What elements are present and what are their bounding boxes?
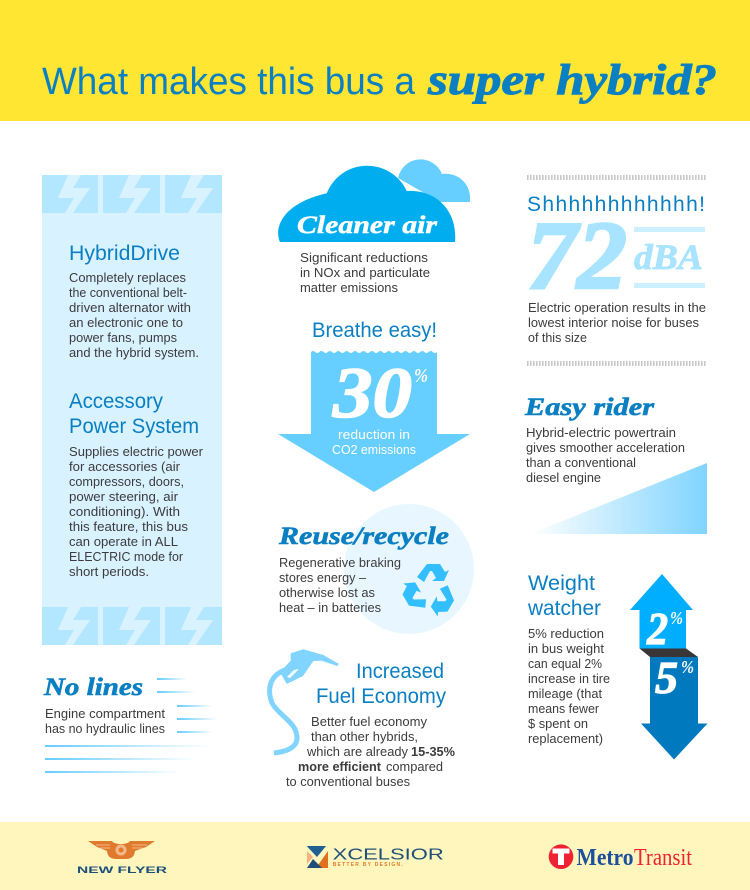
- arrow: down 5 percent: 5: [655, 652, 678, 703]
- title banner: [0, 0, 750, 121]
- heading: Increased Fuel Economy: Fuel Economy: [316, 685, 446, 708]
- heading: Increased Fuel Economy: [316, 660, 446, 708]
- arrow: up 2 percent: %: [670, 608, 683, 628]
- heading: Increased Fuel Economy: Increased: [356, 660, 444, 683]
- text: accessory power description: this feature, this bus: [69, 519, 189, 534]
- text: accessory power description: can operate in ALL: [69, 534, 178, 549]
- text: hybrid drive description: Completely replaces: [69, 270, 186, 285]
- text: weight description: increase in tire: [528, 671, 610, 686]
- text: fuel economy description: Better fuel economy: [311, 714, 427, 729]
- panel: reuse recycle: [278, 504, 474, 634]
- heading: HybridDrive: HybridDrive: [69, 242, 180, 265]
- text: hybrid drive description: and the hybrid system.: [69, 345, 199, 360]
- text: accessory power description: [69, 444, 204, 579]
- text: accessory power description: for accessories (air: [69, 459, 181, 474]
- text: weight description: 5% reduction: [528, 626, 604, 641]
- text: quiet description: of this size: [528, 330, 587, 345]
- panel: cleaner air: [278, 159, 470, 295]
- text: quiet description: lowest interior noise for buses: [528, 315, 699, 330]
- text: weight description: in bus weight: [528, 641, 604, 656]
- text: accessory power description: power steering, air: [69, 489, 179, 504]
- text: no lines description: has no hydraulic lines: [45, 721, 165, 736]
- stat: 72 dBA: dBA: [634, 237, 703, 277]
- text: fuel economy description: 15-35%: [411, 744, 455, 759]
- text: accessory power description: short periods.: [69, 564, 149, 579]
- text: cleaner air description: Significant reductions: [300, 250, 429, 265]
- text: fuel economy description: which are already: [306, 744, 408, 759]
- heading: Accessory Power System: [69, 390, 199, 438]
- icon: clouds: [278, 159, 470, 242]
- arrow: down: [278, 351, 470, 492]
- arrow: up 2 percent: 2: [646, 603, 668, 654]
- logo: Metro Transit: [549, 844, 692, 871]
- heading: Weight watcher: watcher: [527, 597, 601, 620]
- text: weight description: mileage (that: [528, 686, 602, 701]
- top lightning strip: [42, 175, 222, 213]
- text: weight description: means fewer: [528, 701, 600, 716]
- text: hybrid drive description: driven alternator with: [69, 300, 191, 315]
- stat: 30 percent: %: [414, 365, 428, 387]
- text: hybrid drive description: an electronic one to: [69, 315, 183, 330]
- text: accessory power description: conditioning). With: [69, 504, 180, 519]
- chart: acceleration ramp: [530, 463, 707, 534]
- text: reduction in CO2: CO2 emissions: [332, 442, 416, 457]
- text: reduction in CO2: [332, 427, 416, 457]
- text: reduction in CO2: reduction in: [338, 427, 410, 442]
- panel: hybrid drive and accessory power: [42, 175, 222, 645]
- text: easy rider description: [526, 425, 685, 485]
- panel: quiet operation: [527, 178, 706, 364]
- text: reuse description: stores energy –: [279, 570, 367, 585]
- panel: increased fuel economy: [270, 649, 455, 789]
- text: hybrid drive description: power fans, pumps: [69, 330, 177, 345]
- footer band: [0, 822, 750, 890]
- heading: Accessory Power System: Accessory: [69, 390, 163, 413]
- text: hybrid drive description: [69, 270, 199, 360]
- heading: No lines: No lines: [43, 674, 143, 701]
- text: weight description: can equal 2%: [528, 656, 602, 671]
- logo: Xcelsior: BETTER BY DESIGN.: [333, 862, 403, 868]
- text: easy rider description: gives smoother acceleration: [526, 440, 685, 455]
- arrow: down 5 percent: [641, 652, 708, 760]
- text: no lines description: Engine compartment: [45, 706, 165, 721]
- text: fuel economy description: to conventional buses: [286, 774, 410, 789]
- logo: Xcelsior: XCELSIOR: [333, 846, 444, 864]
- text: reuse description: heat – in batteries: [279, 600, 381, 615]
- text: fuel economy description: than other hybrids,: [311, 729, 418, 744]
- text: quiet description: Electric operation results in the: [528, 300, 706, 315]
- heading: Breathe easy: Breathe easy!: [312, 319, 437, 342]
- text: reuse description: Regenerative braking: [279, 555, 401, 570]
- text: easy rider description: diesel engine: [526, 470, 601, 485]
- text: accessory power description: ELECTRIC mode for: [69, 549, 184, 564]
- logo: New Flyer: NEW FLYER: [77, 865, 167, 876]
- text: easy rider description: Hybrid-electric powertrain: [526, 425, 676, 440]
- heading: Reuse/recycle: Reuse/recycle: [278, 523, 449, 550]
- text: no lines description: [45, 706, 165, 736]
- panel: breathe easy: [278, 319, 470, 492]
- text: cleaner air description: in NOx and particulate: [300, 265, 430, 280]
- heading: Weight watcher: [527, 572, 601, 620]
- text: quiet description: [528, 300, 706, 345]
- text: cleaner air description: [300, 250, 430, 295]
- heading: Weight watcher: Weight: [528, 572, 595, 595]
- text: hybrid drive description: the conventional belt-: [69, 285, 187, 300]
- heading: Accessory Power System: Power System: [69, 415, 199, 438]
- stat: 72 dBA: 72: [527, 202, 627, 310]
- bottom lightning strip: [42, 607, 222, 645]
- stat: 30 percent: 30: [332, 353, 412, 433]
- heading: Easy rider: Easy rider: [524, 394, 654, 421]
- stat: 72 dBA: [527, 202, 705, 310]
- title banner: super hybrid?: [427, 57, 717, 104]
- logo: New Flyer: [77, 841, 167, 876]
- fold between arrows: [640, 648, 698, 657]
- text: fuel economy description: compared: [386, 759, 443, 774]
- text: cleaner air description: matter emissions: [300, 280, 398, 295]
- icon: recycling symbol: [398, 564, 459, 619]
- text: weight description: [528, 626, 610, 746]
- arrow: down 5 percent: %: [681, 657, 694, 677]
- heading: Cleaner air: Cleaner air: [297, 212, 437, 239]
- arrow: up 2 percent: [630, 574, 693, 654]
- icon: fuel nozzle: [270, 649, 339, 753]
- text: accessory power description: Supplies electric power: [69, 444, 204, 459]
- text: fuel economy description: more efficient: [298, 759, 382, 774]
- text: reuse description: otherwise lost as: [279, 585, 375, 600]
- text: weight description: $ spent on: [528, 716, 588, 731]
- text: reuse description: [279, 555, 401, 615]
- speed lines: [45, 678, 218, 773]
- logo: Xcelsior: [307, 846, 444, 868]
- heading: Shhh: Shhhhhhhhhhhh!: [527, 193, 705, 216]
- text: easy rider description: than a conventional: [526, 455, 636, 470]
- panel: weight watcher: [527, 572, 708, 760]
- logo: Metro Transit: Transit: [634, 845, 692, 871]
- panel: easy rider: [524, 394, 707, 534]
- panel: no lines: [43, 674, 218, 773]
- text: accessory power description: compressors, doors,: [69, 474, 184, 489]
- logo: Metro Transit: Metro: [576, 845, 634, 871]
- text: weight description: replacement): [528, 731, 603, 746]
- title banner: What makes this bus a: [42, 61, 416, 103]
- text: fuel economy description: [286, 714, 455, 789]
